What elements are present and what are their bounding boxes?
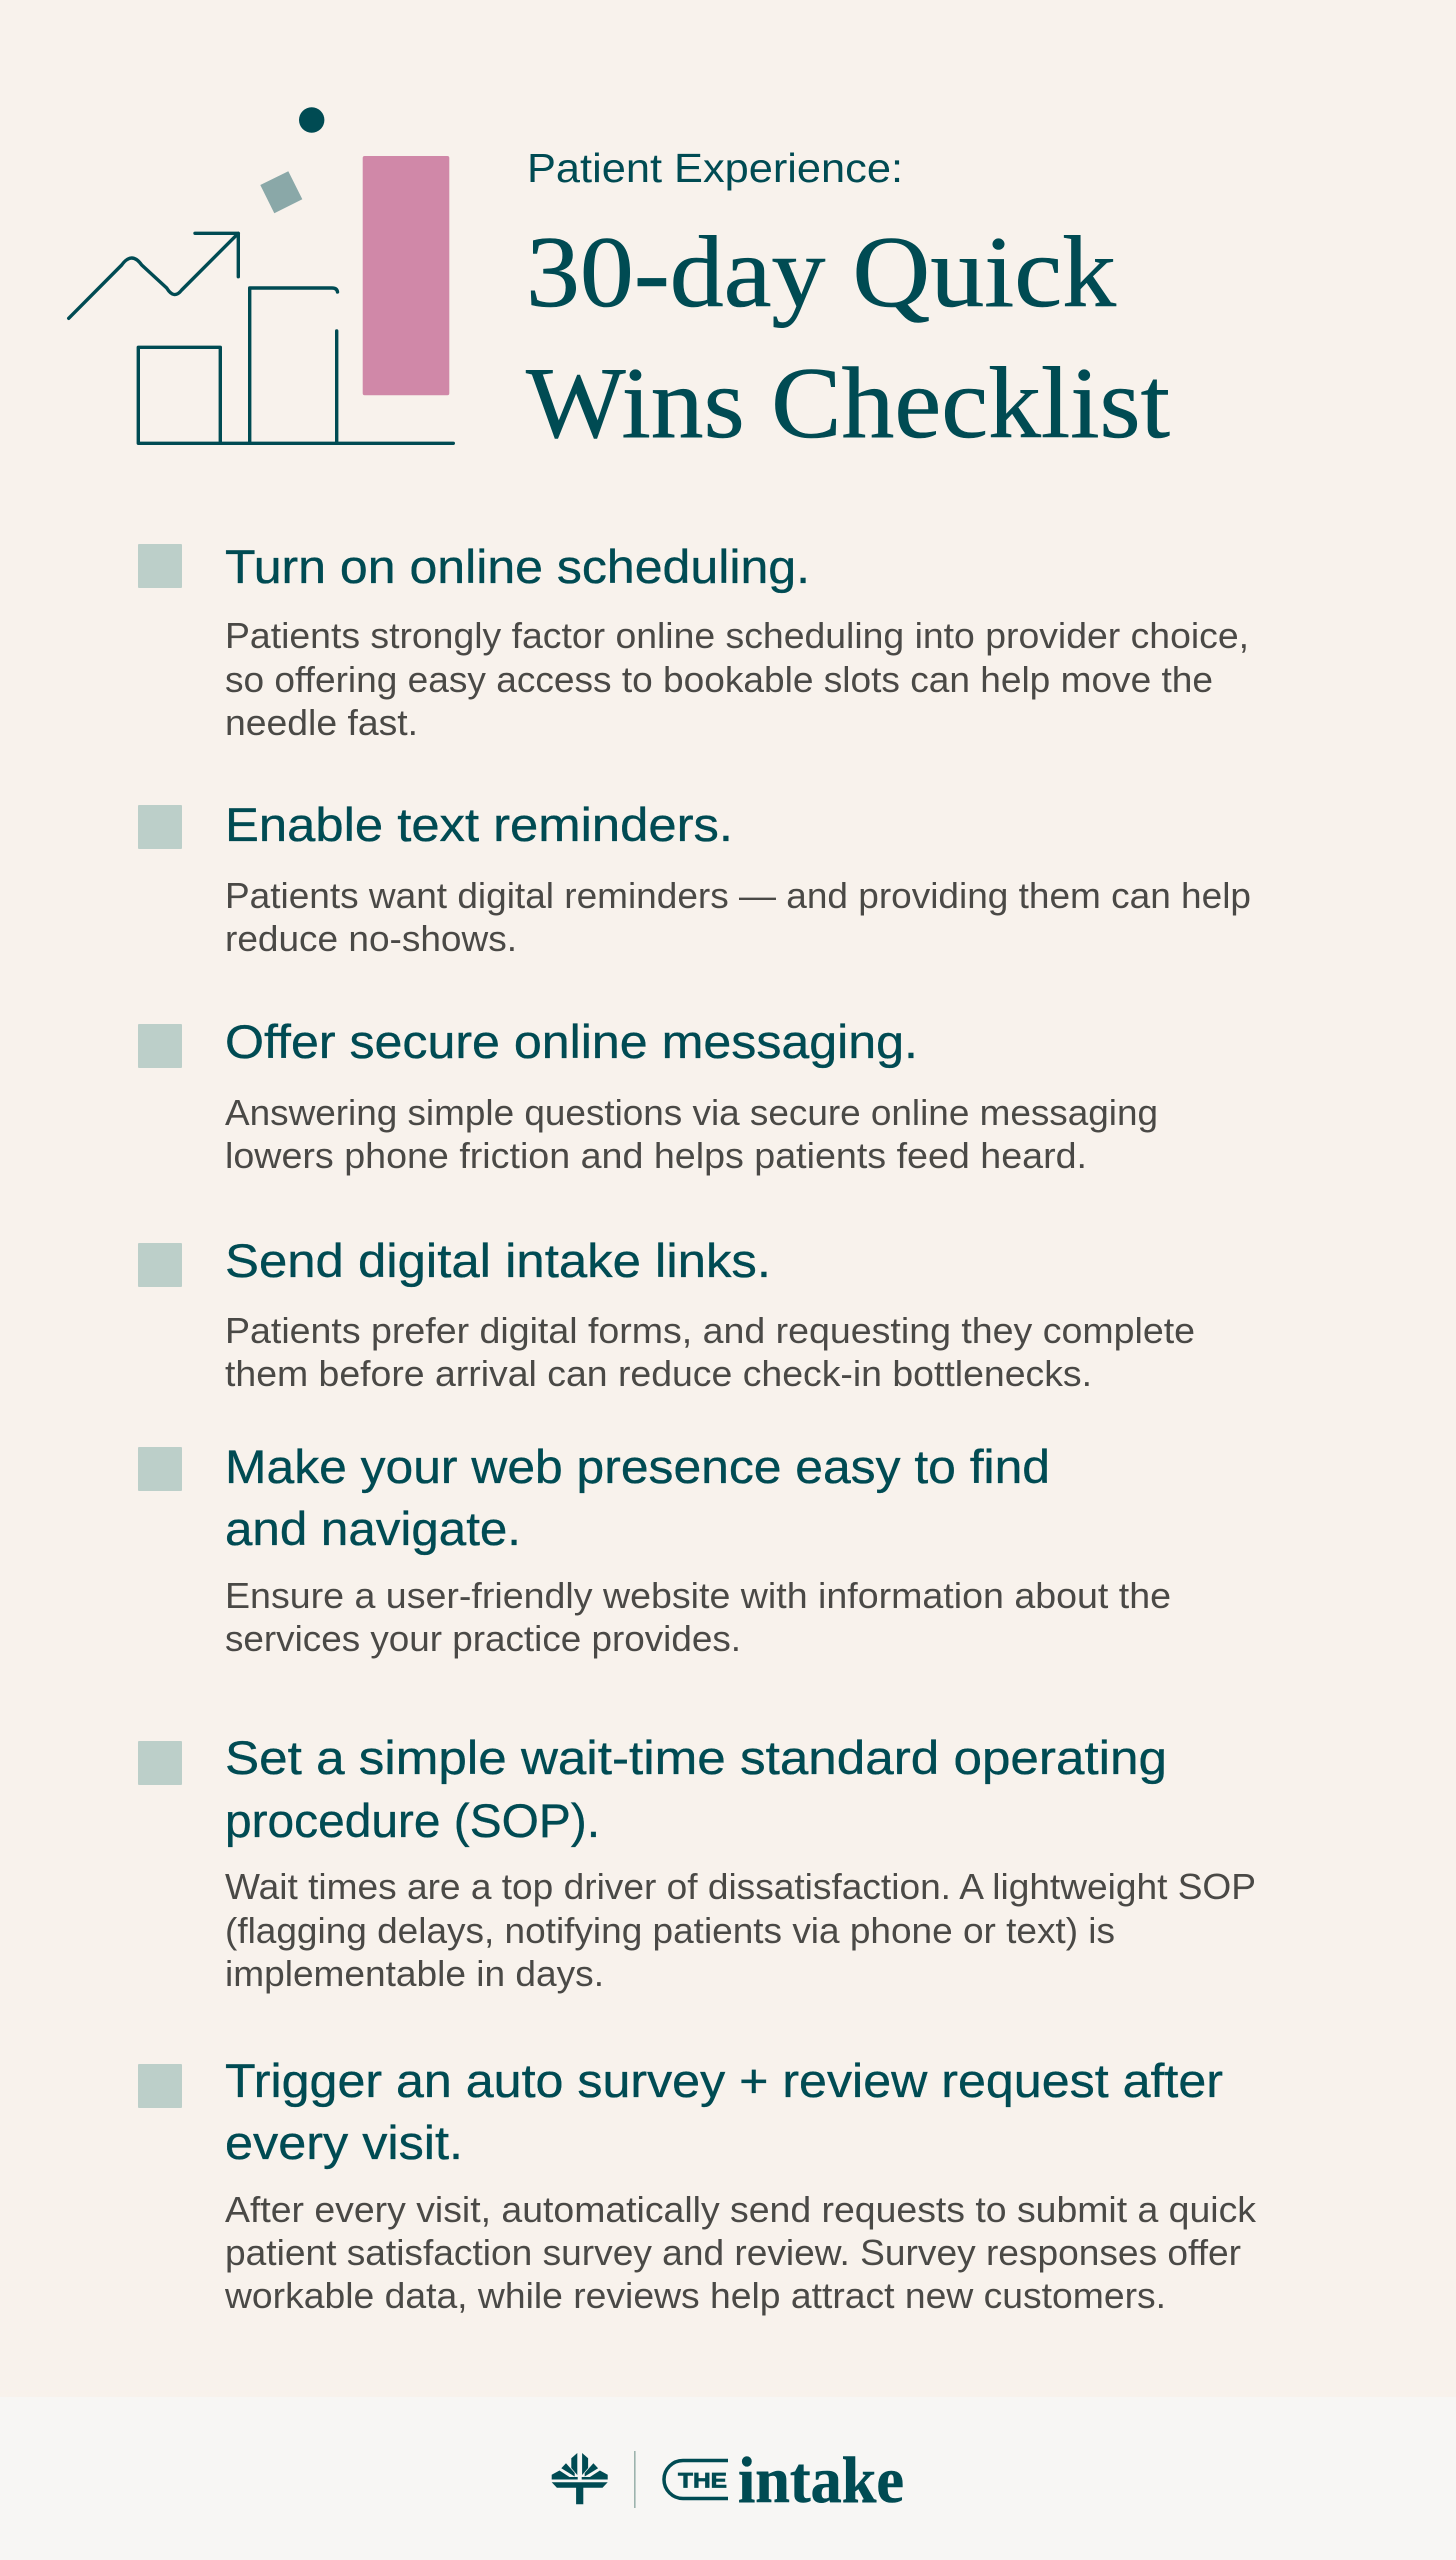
- item heading: [225, 1731, 1167, 1847]
- footer band: [0, 2397, 1456, 2560]
- item heading: Enable text reminders.: [225, 798, 733, 851]
- title line 2: Wins Checklist: [526, 347, 1170, 460]
- checkbox: [138, 805, 182, 849]
- item heading: procedure (SOP).: [225, 1794, 600, 1847]
- heading block: [526, 145, 1170, 460]
- item body: so offering easy access to bookable slots can help move the: [225, 659, 1213, 700]
- icon: tilted grey square: [260, 171, 302, 213]
- checkbox: [138, 544, 182, 588]
- item body: Patients strongly factor online scheduling into provider choice,: [225, 615, 1249, 656]
- checklist item 2: [138, 798, 1251, 959]
- item body: Patients prefer digital forms, and requesting they complete: [225, 1310, 1195, 1351]
- item heading: Turn on online scheduling.: [225, 540, 810, 593]
- item body: [225, 1092, 1158, 1176]
- item heading: Make your web presence easy to find: [225, 1440, 1050, 1493]
- item body: [225, 1866, 1256, 1994]
- item body: After every visit, automatically send requests to submit a quick: [225, 2189, 1257, 2230]
- item body: (flagging delays, notifying patients via phone or text) is: [225, 1910, 1115, 1951]
- checkbox: [138, 1243, 182, 1287]
- wordmark: The Intake: [664, 2444, 904, 2517]
- title line 1: 30-day Quick: [526, 216, 1116, 329]
- item body: lowers phone friction and helps patients feed heard.: [225, 1135, 1087, 1176]
- checklist item 4: [138, 1234, 1195, 1394]
- checkbox: [138, 1741, 182, 1785]
- pill outline: [664, 2460, 728, 2498]
- item heading: Offer secure online messaging.: [225, 1015, 918, 1068]
- word: THE: THE: [678, 2470, 727, 2492]
- illustration: rising chart: [69, 107, 453, 443]
- icon: outlined bars and baseline: [138, 288, 453, 443]
- item heading: Send digital intake links.: [225, 1234, 771, 1287]
- item body: [224, 2189, 1257, 2316]
- checklist item 5: [138, 1440, 1171, 1659]
- checklist item 3: [138, 1015, 1158, 1176]
- item body: [225, 1310, 1195, 1394]
- checklist item 6: [138, 1731, 1256, 1994]
- item body: Patients want digital reminders — and providing them can help: [225, 875, 1251, 916]
- item body: services your practice provides.: [225, 1618, 741, 1659]
- checkbox: [138, 2064, 182, 2108]
- item body: Ensure a user-friendly website with information about the: [225, 1575, 1171, 1616]
- item heading: Set a simple wait-time standard operating: [225, 1731, 1167, 1784]
- item heading: every visit.: [225, 2116, 463, 2169]
- icon: tree logo: [552, 2453, 608, 2504]
- divider: [634, 2451, 636, 2508]
- arrow: trend line: [69, 233, 238, 318]
- item heading: and navigate.: [225, 1502, 521, 1555]
- item body: patient satisfaction survey and review. Survey responses offer: [225, 2232, 1241, 2273]
- item body: them before arrival can reduce check-in bottlenecks.: [225, 1353, 1092, 1394]
- icon: dark circle: [299, 107, 324, 133]
- item body: [225, 1575, 1171, 1659]
- item body: needle fast.: [225, 702, 418, 743]
- item heading: [225, 2054, 1223, 2169]
- item heading: Trigger an auto survey + review request after: [225, 2054, 1223, 2107]
- subtitle: Patient Experience:: [527, 145, 903, 191]
- checklist item 1: [138, 540, 1249, 743]
- icon: pink bar: [363, 156, 449, 395]
- item body: [225, 875, 1251, 959]
- checkbox: [138, 1024, 182, 1068]
- item body: Answering simple questions via secure online messaging: [225, 1092, 1158, 1133]
- item body: Wait times are a top driver of dissatisfaction. A lightweight SOP: [225, 1866, 1256, 1907]
- item body: implementable in days.: [225, 1953, 604, 1994]
- item body: reduce no-shows.: [225, 918, 517, 959]
- item heading: [225, 1440, 1050, 1555]
- checkbox: [138, 1447, 182, 1491]
- item body: [225, 615, 1249, 743]
- word: intake: intake: [738, 2444, 904, 2517]
- checklist item 7: [138, 2054, 1257, 2316]
- item body: workable data, while reviews help attract new customers.: [224, 2275, 1166, 2316]
